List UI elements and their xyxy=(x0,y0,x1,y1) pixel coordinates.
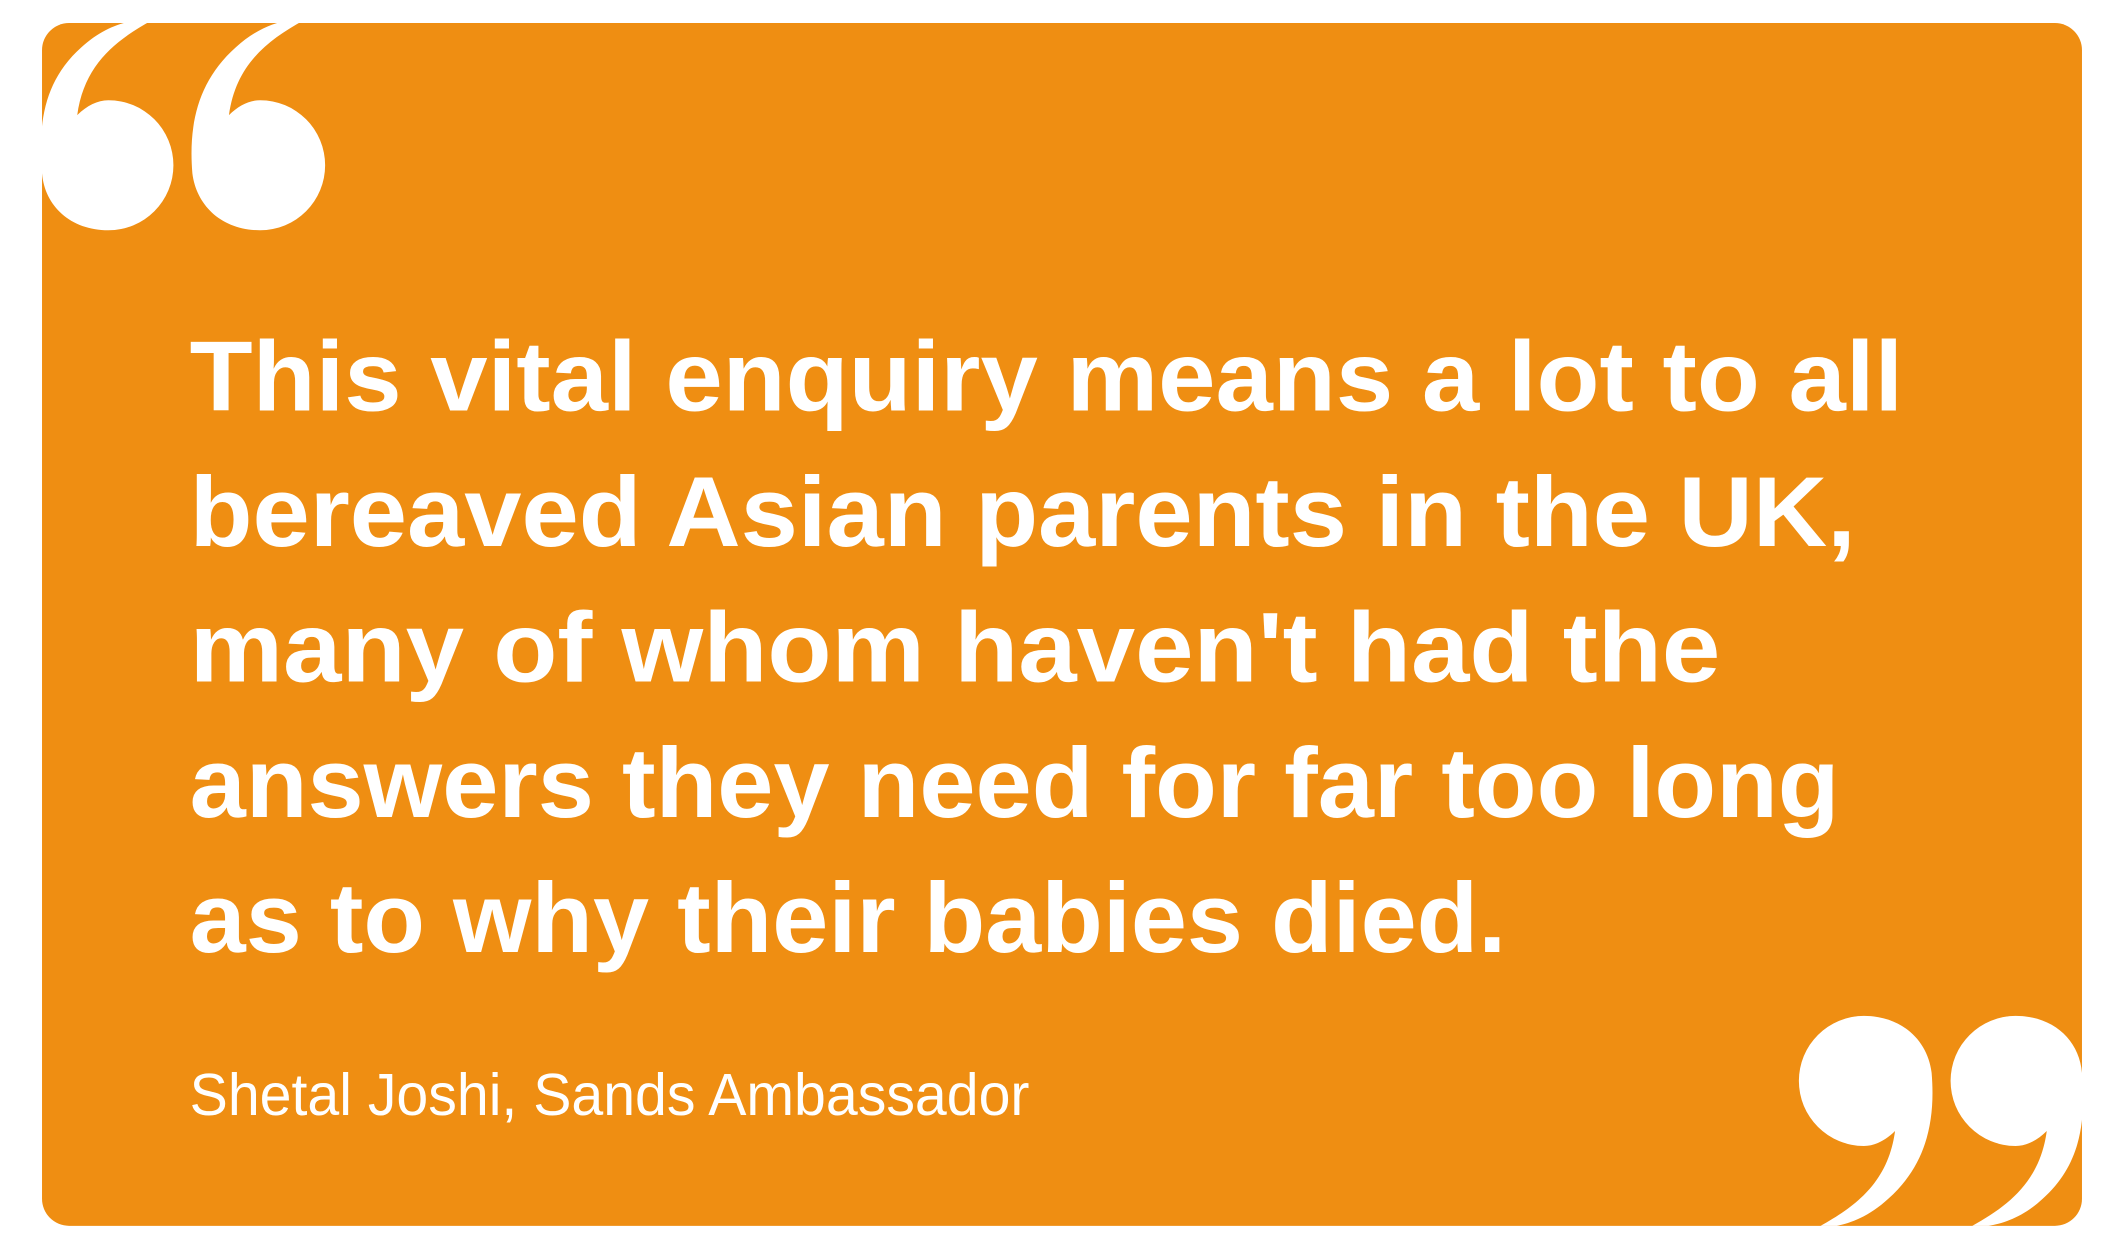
quote text: This vital enquiry means a lot to all xyxy=(190,320,1903,431)
icon: opening quote marks xyxy=(41,20,325,230)
attribution: Shetal Joshi, Sands Ambassador xyxy=(190,1061,1029,1128)
quote text: as to why their babies died. xyxy=(190,862,1506,973)
quote text: many of whom haven't had the xyxy=(190,591,1720,702)
quote text: answers they need for far too long xyxy=(190,727,1840,838)
icon: closing quote marks xyxy=(1799,1016,2083,1226)
quote text xyxy=(190,320,1903,973)
quote text: bereaved Asian parents in the UK, xyxy=(190,456,1856,567)
